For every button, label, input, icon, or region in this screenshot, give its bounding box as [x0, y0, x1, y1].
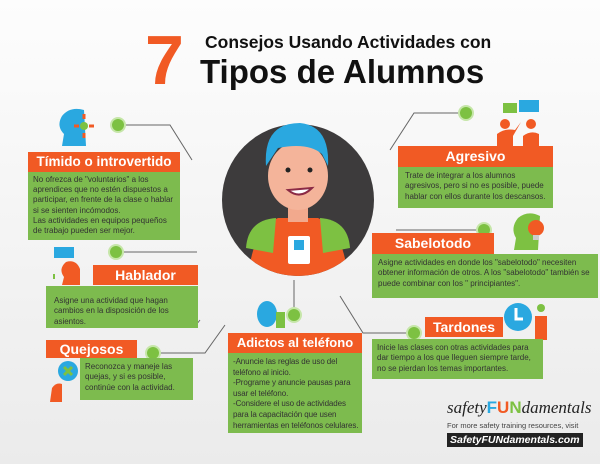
panel: Adictos al teléfono: [228, 333, 362, 433]
panel: Tímido: Tímido o introvertido: [36, 154, 172, 169]
icon: tardones: [504, 303, 547, 340]
icon: sabelotodo: [513, 213, 544, 250]
icon: quejosos: [50, 361, 78, 402]
icon: agresivo: [497, 100, 539, 146]
title: 7: [145, 21, 184, 99]
center illustration: [222, 123, 374, 276]
panel: Quejosos: [46, 340, 193, 400]
icon: hablador: [53, 247, 80, 285]
icon: timido head: [59, 108, 94, 146]
logo: SafetyFUNdamentals.com: [450, 434, 580, 446]
panel: Hablador: Hablador: [115, 267, 176, 283]
panel: Tímido: No ofrezca de "voluntarios" a los aprendices que no estén dispuestos a participar, en frente de la clase o hablar si se sienten incómodos.: [33, 175, 173, 215]
panel: Adictos al teléfono: -Programe y anuncie pausas para usar el teléfono.: [233, 378, 350, 398]
title: Consejos Usando Actividades con: [205, 32, 491, 52]
panel: Sabelotodo: Asigne actividades en donde los "sabelotodo" necesiten obtener información de otros. A los "sabelotodo" también se puede combinar con los " principiantes".: [378, 258, 590, 288]
panel: Adictos al teléfono: -Anuncie las reglas de uso del teléfono al inicio.: [233, 357, 337, 377]
logo: safetyFUNdamentals: [447, 398, 592, 417]
panel: Agresivo: [398, 146, 553, 208]
panel: Hablador: Asigne una actividad que hagan cambios en la disposición de los asientos.: [54, 296, 169, 326]
panel: Quejosos: Reconozca y maneje las quejas, y si es posible, continúe con la actividad.: [85, 362, 175, 392]
panel: Sabelotodo: Sabelotodo: [395, 235, 471, 251]
panel: Tardones: Tardones: [433, 319, 495, 335]
logo: [447, 398, 592, 447]
panel: Tardones: Inicie las clases con otras actividades para dar tiempo a los que lleguen siempre tarde, no se pierdan los temas importantes.: [377, 343, 531, 373]
panel: Quejosos: Quejosos: [60, 341, 123, 357]
panel: Adictos al teléfono: -Considere el uso de actividades para la capacitación que usen herramientas en teléfonos celulares.: [233, 399, 358, 430]
logo: For more safety training resources, visit: [447, 421, 578, 430]
panel: Agresivo: Agresivo: [446, 148, 505, 164]
title: Tipos de Alumnos: [200, 53, 484, 90]
panel: Agresivo: Trate de integrar a los alumnos agresivos, pero si no es posible, puede hablar con ellos durante los descansos.: [405, 171, 546, 201]
panel: Tardones: [372, 317, 543, 379]
title: [145, 21, 491, 99]
panel: Adictos al teléfono: Adictos al teléfono: [237, 335, 353, 350]
dots: [112, 119, 124, 131]
panel: Hablador: [46, 265, 198, 328]
panel: Tímido: Las actividades en equipos pequeños de trabajo pueden ser mejor.: [33, 216, 167, 235]
panel: Tímido: [28, 152, 180, 240]
icon: phone addict: [257, 301, 285, 328]
panel: Sabelotodo: [372, 233, 598, 298]
